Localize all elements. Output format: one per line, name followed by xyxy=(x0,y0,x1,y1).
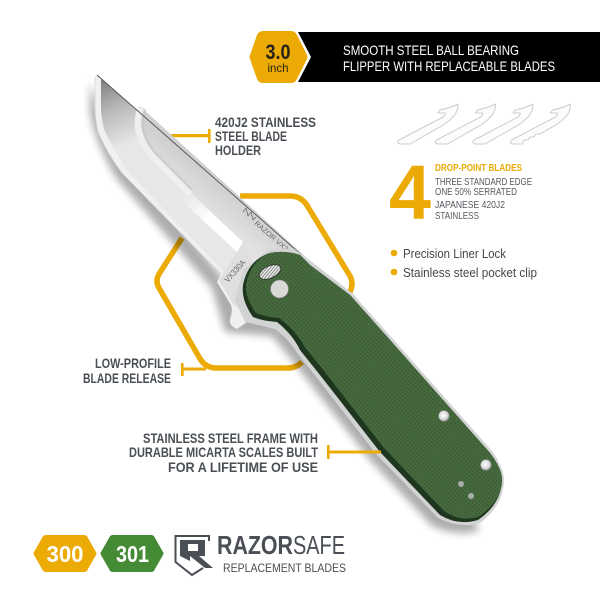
badge: 301: 301 xyxy=(116,541,149,567)
label: steel frame: DURABLE MICARTA SCALES BUILT xyxy=(129,444,318,460)
knife shadow xyxy=(90,82,480,533)
blade icon 1 xyxy=(398,104,458,144)
logo: RazorSafe replacement blades xyxy=(176,530,346,575)
badge: 3.0 inch hexagon xyxy=(250,31,308,83)
label: blade holder: STEEL BLADE xyxy=(215,128,287,144)
blade icon 2 xyxy=(435,104,496,144)
hexagon outline behind knife xyxy=(157,196,352,368)
blades description: THREE STANDARD EDGE xyxy=(435,176,532,188)
blade logo mountain mark xyxy=(243,208,256,220)
micarta scale dark edge xyxy=(243,252,502,522)
blades description xyxy=(435,162,532,222)
leader: blade holder xyxy=(168,129,211,143)
steel frame xyxy=(235,248,504,525)
blade main grind xyxy=(101,79,320,318)
logo tagline: REPLACEMENT BLADES xyxy=(223,561,346,575)
blade icon 3 xyxy=(473,104,533,144)
small pin two xyxy=(468,493,474,499)
micarta weave texture xyxy=(246,252,502,519)
size badge and headline banner xyxy=(250,31,600,83)
blade holder tang tone xyxy=(219,243,320,318)
spine edge xyxy=(97,75,305,258)
blade upper brushed face xyxy=(139,108,320,278)
flipper slot xyxy=(257,262,283,282)
label: blade holder: 420J2 STAINLESS xyxy=(215,114,316,130)
banner: black headline bar: SMOOTH STEEL BALL BEARING xyxy=(343,42,519,58)
label: blade holder xyxy=(215,114,316,158)
blade icon 4 serrated xyxy=(510,104,570,144)
blades description: JAPANESE 420J2 xyxy=(435,199,505,211)
blade logo: RAZOR VX3 xyxy=(253,220,289,253)
logo shield mark xyxy=(176,536,213,575)
banner: black headline bar xyxy=(298,32,600,82)
handle xyxy=(235,248,504,525)
badge: 301 xyxy=(100,535,164,572)
feature bullets: Stainless steel pocket clip xyxy=(403,265,537,280)
small pin one xyxy=(458,481,464,487)
label: steel frame: STAINLESS STEEL FRAME WITH xyxy=(143,430,318,446)
micarta scale xyxy=(246,252,502,519)
blade groove xyxy=(138,108,190,194)
blade xyxy=(95,75,320,329)
blades description: DROP-POINT BLADES xyxy=(435,162,522,174)
badge: 3.0 inch hexagon: inch xyxy=(268,61,288,75)
label: steel frame: FOR A LIFETIME OF USE xyxy=(168,459,318,475)
label: blade release xyxy=(83,355,171,386)
blade bevel outline xyxy=(95,77,221,282)
frame screw lower xyxy=(480,460,492,470)
label: blade release: LOW-PROFILE xyxy=(95,355,171,371)
knife xyxy=(90,75,504,533)
feature bullets: Precision Liner Lock xyxy=(403,246,506,261)
frame screw upper xyxy=(438,410,450,422)
blades description: ONE 50% SERRATED xyxy=(435,186,517,198)
banner: black headline bar: FLIPPER WITH REPLACEABLE BLADES xyxy=(343,58,555,74)
blade model number: VX330A xyxy=(222,257,248,284)
big numeral 4: 4 xyxy=(389,150,431,236)
badge: 3.0 inch hexagon: 3.0 xyxy=(266,41,290,64)
blade highlight streak xyxy=(181,191,243,252)
logo wordmark RAZOR: RAZOR xyxy=(217,530,293,560)
logo wordmark SAFE: SAFE xyxy=(293,530,345,560)
badge: 300 xyxy=(34,535,96,572)
badge: 300: 300 xyxy=(46,541,84,567)
label: steel frame xyxy=(129,430,318,475)
icons: four replacement blades xyxy=(398,104,570,144)
pivot screw xyxy=(270,280,288,298)
leader: blade release xyxy=(181,363,206,376)
feature bullets xyxy=(391,246,537,280)
label: blade release: BLADE RELEASE xyxy=(83,370,171,386)
label: blade holder: HOLDER xyxy=(215,142,261,158)
leader: steel frame xyxy=(327,445,381,459)
blades description: STAINLESS xyxy=(435,210,479,222)
